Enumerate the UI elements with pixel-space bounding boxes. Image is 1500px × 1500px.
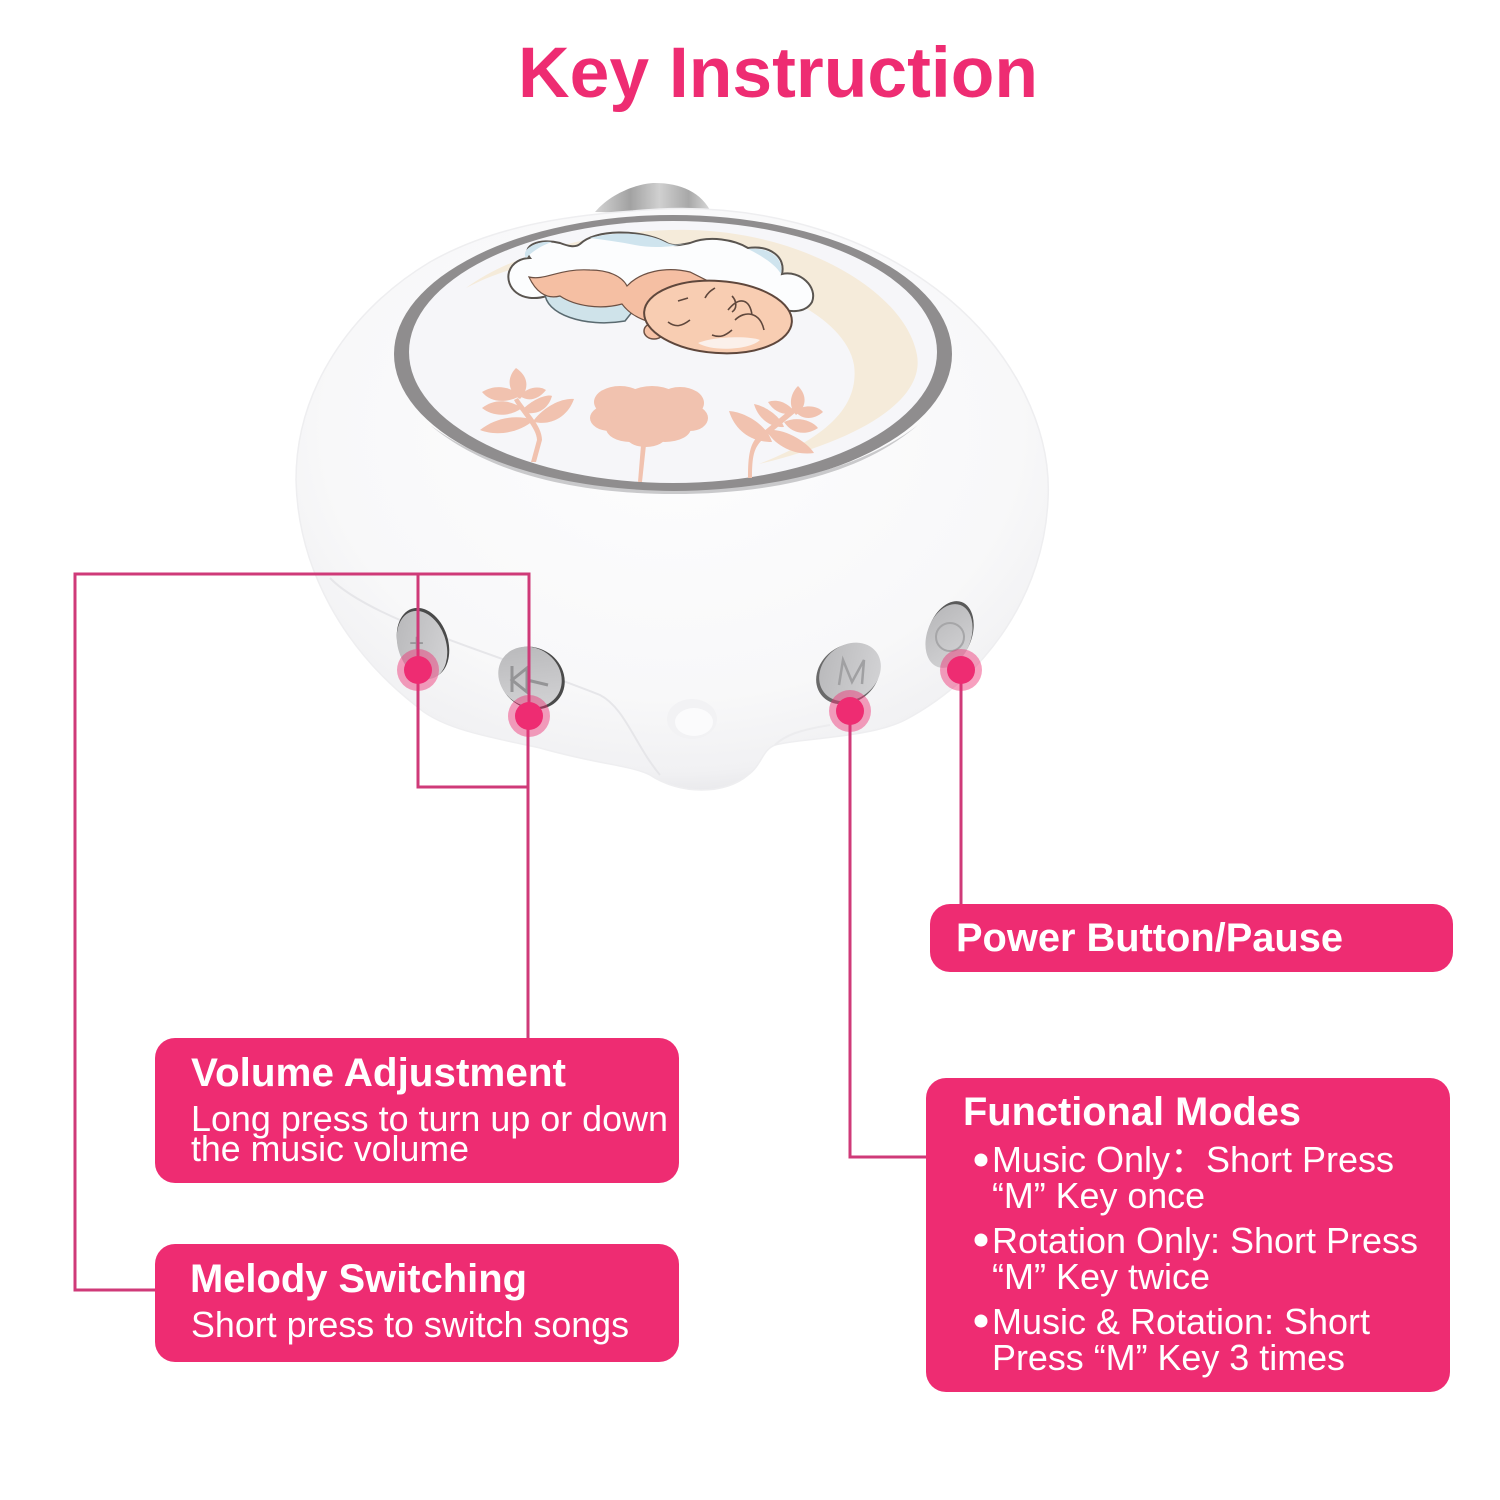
- title: Key Instruction: [518, 33, 1038, 113]
- panel: functional modes: [926, 1078, 1450, 1392]
- hanging tab hole: [667, 699, 717, 739]
- panel: functional modes: Music Only：Short Press: [992, 1139, 1394, 1180]
- panel: melody switching: [155, 1244, 679, 1362]
- panel: power button: Power Button/Pause: [956, 916, 1343, 960]
- hotspot: volume plus: [397, 649, 439, 691]
- panel: functional modes: Rotation Only: Short Press: [992, 1220, 1418, 1261]
- panel: volume adjustment: the music volume: [191, 1128, 469, 1169]
- hotspot: next: [508, 695, 550, 737]
- hotspot: M: [829, 690, 871, 732]
- button: power: [917, 595, 982, 675]
- product: music box device: [296, 183, 1048, 790]
- panel: functional modes: “M” Key twice: [992, 1256, 1210, 1297]
- panel: power button: [930, 904, 1453, 972]
- panel: volume adjustment: [155, 1038, 679, 1183]
- panel: melody switching: Short press to switch songs: [191, 1304, 629, 1345]
- disc ring lip: [430, 425, 918, 494]
- cloud: [508, 232, 813, 311]
- disc face: [409, 221, 937, 483]
- plant: right: [729, 386, 823, 478]
- button: volume plus: +: [409, 628, 424, 658]
- baby body: [529, 270, 726, 322]
- panel: volume adjustment: Volume Adjustment: [191, 1051, 566, 1095]
- flower: centre: [590, 386, 708, 482]
- hotspot: power: [940, 649, 982, 691]
- moon crescent: [466, 230, 918, 464]
- panel: volume adjustment: Long press to turn up or down: [191, 1098, 668, 1139]
- panel: functional modes: Music & Rotation: Short: [992, 1301, 1370, 1342]
- button: next: [486, 634, 577, 722]
- baby on cloud: [508, 232, 813, 358]
- panel: melody switching: Melody Switching: [190, 1257, 527, 1301]
- disc ring: [394, 215, 952, 493]
- button: M: [804, 630, 893, 717]
- plant: left: [480, 368, 574, 462]
- diaper: [545, 284, 640, 323]
- chin highlight: [698, 337, 760, 349]
- device body: [296, 209, 1048, 790]
- ear: [644, 323, 664, 339]
- knob: [595, 183, 712, 214]
- panel: functional modes: Press “M” Key 3 times: [992, 1337, 1345, 1378]
- connector lines: [75, 574, 961, 1290]
- panel: functional modes: Functional Modes: [963, 1090, 1301, 1134]
- seam: [330, 578, 660, 775]
- button: volume plus: [388, 601, 458, 686]
- seam right: [775, 725, 830, 745]
- head: [642, 276, 794, 358]
- face lines: [668, 288, 764, 336]
- cloud blue shading: [525, 234, 781, 274]
- panel: functional modes: “M” Key once: [992, 1175, 1205, 1216]
